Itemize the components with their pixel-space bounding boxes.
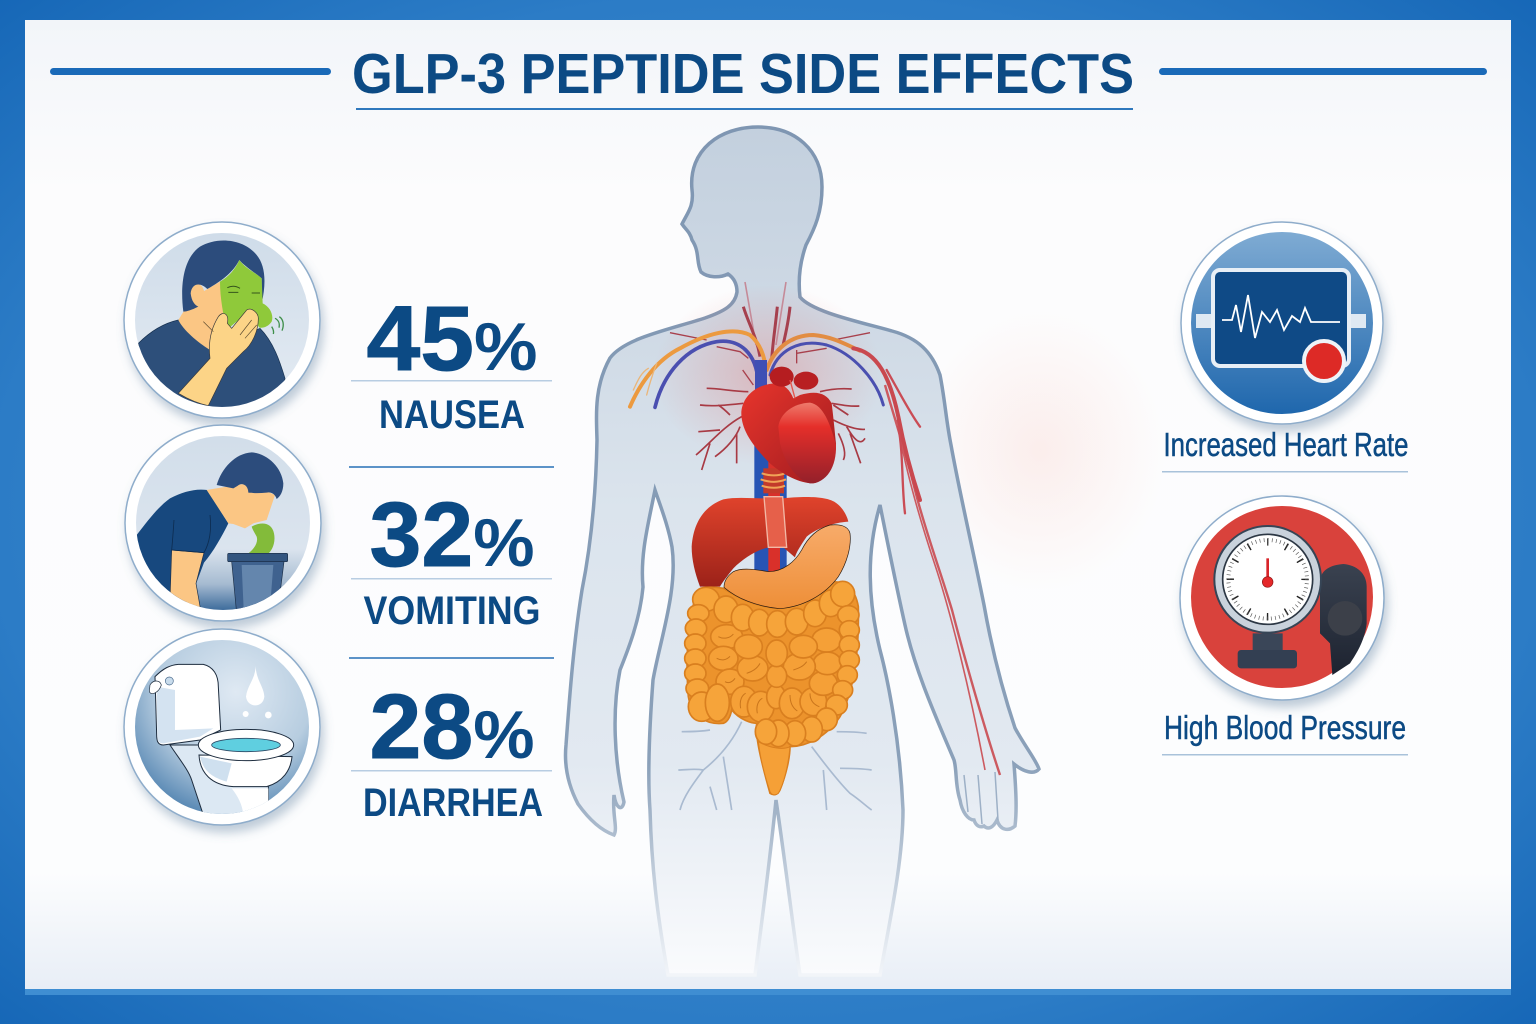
icon: vomiting bbox=[120, 425, 321, 633]
human body illustration bbox=[566, 127, 1039, 975]
icon: heart monitor bbox=[1181, 222, 1383, 424]
chest glow bbox=[653, 285, 883, 465]
body silhouette bbox=[566, 127, 1039, 975]
chest branches bbox=[670, 333, 870, 385]
stomach bbox=[724, 525, 850, 609]
colon haustra bbox=[685, 581, 859, 747]
aorta bbox=[754, 360, 787, 573]
title with rules: GLP-3 PEPTIDE SIDE EFFECTS bbox=[352, 42, 1134, 106]
stat: nausea 45%: 45% bbox=[366, 288, 538, 390]
stat: vomiting 32% bbox=[351, 484, 552, 633]
rectum bbox=[758, 742, 790, 795]
long arm vessels bbox=[745, 282, 1000, 775]
arteries and veins bbox=[630, 331, 920, 513]
lower faint vessels bbox=[678, 722, 872, 810]
organs group bbox=[630, 307, 920, 810]
title with rules bbox=[50, 42, 1487, 110]
stat: diarrhea 28%: DIARRHEA bbox=[363, 781, 543, 825]
stat: diarrhea 28%: 28% bbox=[370, 676, 534, 778]
finger lines bbox=[964, 772, 998, 824]
icon: blood pressure gauge bbox=[1180, 496, 1384, 700]
label: increased heart rate: Increased Heart Rate bbox=[1164, 426, 1408, 463]
soft red glow bbox=[915, 310, 1165, 590]
neck vessels bbox=[743, 307, 790, 360]
icon: nausea bbox=[124, 222, 320, 428]
stat: nausea 45% bbox=[351, 288, 552, 437]
small intestine creases bbox=[717, 634, 819, 713]
icon: toilet bbox=[124, 629, 320, 825]
stat: nausea 45%: NAUSEA bbox=[379, 393, 525, 437]
label: high blood pressure: High Blood Pressure bbox=[1164, 709, 1406, 746]
branching vessels bbox=[696, 388, 865, 470]
stat: diarrhea 28% bbox=[351, 676, 552, 825]
large intestine base bbox=[687, 582, 858, 795]
liver bbox=[692, 497, 848, 587]
small intestine loops bbox=[709, 625, 841, 722]
heart bbox=[741, 367, 836, 483]
stat: vomiting 32%: 32% bbox=[370, 484, 534, 586]
stat: vomiting 32%: VOMITING bbox=[364, 589, 540, 633]
